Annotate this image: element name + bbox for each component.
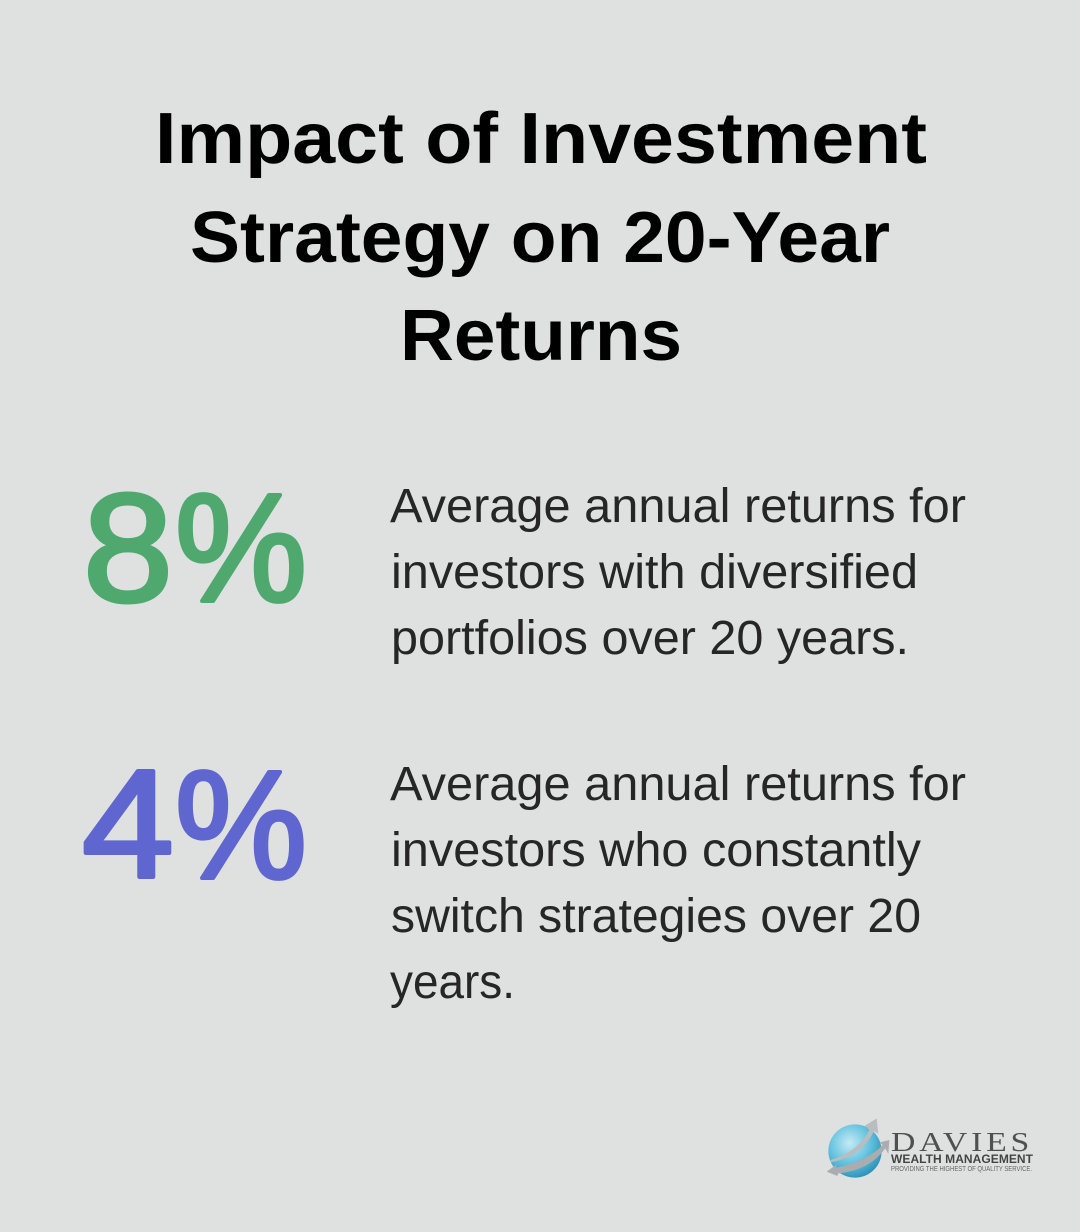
stat: 8%: % bbox=[175, 462, 307, 634]
wordmark: DAVIES bbox=[891, 1127, 1033, 1157]
text: switching strategies description: investors who constantly bbox=[391, 824, 921, 877]
title: Strategy on 20-Year bbox=[190, 198, 890, 278]
icon: globe with arrows bbox=[827, 1118, 889, 1178]
text: diversified portfolios description bbox=[390, 480, 966, 665]
stat: 8%: 8 bbox=[83, 462, 173, 634]
logo: Davies Wealth Management: WEALTH MANAGEMENT bbox=[891, 1152, 1034, 1166]
logo: Davies Wealth Management: PROVIDING THE HIGHEST OF QUALITY SERVICE. bbox=[891, 1164, 1032, 1173]
text: switching strategies description: switch strategies over 20 bbox=[391, 890, 921, 943]
stat: 4%: 4 bbox=[82, 738, 174, 910]
text: diversified portfolios description: investors with diversified bbox=[391, 546, 918, 599]
stat: 4%: % bbox=[175, 739, 307, 911]
text: diversified portfolios description: portfolios over 20 years. bbox=[391, 612, 909, 665]
text: diversified portfolios description: Average annual returns for bbox=[390, 480, 966, 533]
title: Returns bbox=[400, 296, 682, 376]
title bbox=[155, 99, 927, 376]
logo: Davies Wealth Management bbox=[827, 1118, 1034, 1178]
text: switching strategies description: Average annual returns for bbox=[390, 758, 966, 811]
title: Impact of Investment bbox=[155, 99, 927, 179]
text: switching strategies description bbox=[390, 758, 966, 1009]
stat: 4% bbox=[82, 738, 307, 911]
stat: 8% bbox=[83, 462, 307, 634]
text: switching strategies description: years. bbox=[390, 956, 515, 1009]
